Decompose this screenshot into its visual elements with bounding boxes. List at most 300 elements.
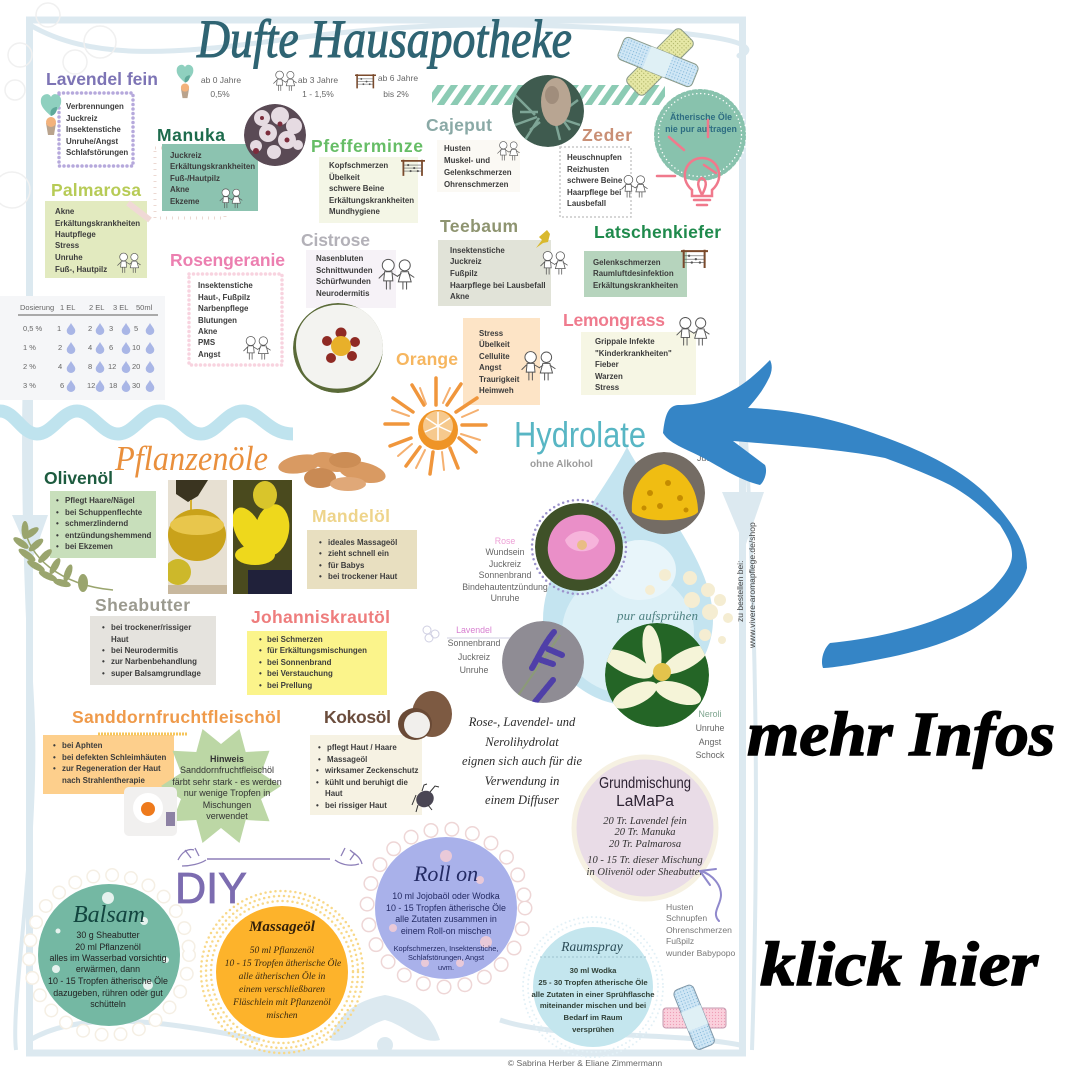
panel: Balsam: 20 ml Pflanzenöl	[75, 942, 141, 952]
heading: Hydrolate: Hydrolate	[514, 414, 646, 455]
arrow: big blue	[663, 360, 1027, 668]
callout: Hinweis star: Hinweis	[210, 754, 244, 764]
text: Lavendel hydrolate: Sonnenbrand	[448, 638, 501, 648]
panel: Mandelöl: ideales Massageöl	[328, 538, 397, 547]
icon: balloon, from birth	[177, 65, 193, 98]
label: pur aufsprühen: pur aufsprühen	[616, 608, 698, 623]
panel: Cajeput: Ohrenschmerzen	[444, 180, 509, 189]
panel: Lemongrass: "Kinderkrankheiten"	[595, 349, 672, 358]
panel: Sanddornfruchtfleischöl: bei Aphten	[62, 741, 103, 750]
panel: Zeder: Haarpflege bei	[567, 188, 621, 197]
footer copyright: © Sabrina Herber & Eliane Zimmermann	[508, 1058, 662, 1068]
photo: cedar cone	[512, 75, 584, 147]
panel: Johanniskrautöl	[247, 607, 390, 695]
text: Lavendel hydrolate: Lavendel	[456, 625, 492, 635]
table: dosage: 6	[109, 343, 113, 352]
panel: Rosengeranie: Haut-, Fußpilz	[198, 293, 250, 302]
panel: Zeder: Reizhusten	[567, 165, 609, 174]
panel: Manuka: Akne	[170, 185, 190, 194]
panel: Manuka: Juckreiz	[170, 151, 202, 160]
panel: Sheabutter: Sheabutter	[95, 595, 190, 615]
panel: Teebaum: Fußpilz	[450, 269, 478, 278]
panel: Olivenöl: •	[56, 496, 59, 505]
panel: Lemongrass: Warzen	[595, 372, 623, 381]
panel: Orange: Traurigkeit	[479, 375, 520, 384]
decorative wave	[0, 411, 293, 434]
panel: Olivenöl: bei Ekzemen	[65, 542, 113, 551]
panel: Lavendel fein: Juckreiz	[66, 114, 98, 123]
lace ornaments top left	[0, 3, 116, 208]
panel: Kokosöl: Massageöl	[327, 755, 367, 764]
panel: Cistrose: Schnittwunden	[316, 266, 373, 275]
callout: Hinweis star	[161, 729, 282, 843]
photo: cistus flower	[293, 303, 383, 393]
text: Neroli hydrolate: Unruhe	[696, 723, 725, 733]
panel: Lemongrass	[563, 310, 709, 395]
panel: Olivenöl: •	[56, 542, 59, 551]
panel: Sheabutter: zur Narbenbehandlung	[111, 657, 197, 666]
photo: St John's wort	[233, 480, 292, 594]
covered label behind arrow: Juckreiz	[697, 453, 729, 463]
panel: Zeder: Zeder	[582, 125, 632, 145]
panel: Johanniskrautöl: •	[259, 635, 262, 644]
panel: Pfefferminze: Pfefferminze	[311, 136, 423, 156]
panel: Kokosöl: •	[318, 755, 321, 764]
table: dosage: 1 EL	[60, 303, 75, 312]
panel: Lemongrass: Lemongrass	[563, 310, 665, 330]
panel: Kokosöl: bei rissiger Haut	[325, 801, 387, 810]
panel: Orange: Orange	[396, 349, 458, 369]
panel: Sanddornfruchtfleischöl	[43, 707, 281, 794]
panel: Cistrose: Nasenbluten	[316, 254, 364, 263]
panel: Massageöl: 50 ml Pflanzenöl	[250, 945, 315, 956]
panel: Sheabutter: •	[102, 669, 105, 678]
age legend	[177, 65, 418, 99]
panel: Teebaum: Juckreiz	[450, 257, 482, 266]
panel: Grundmischung LaMaPa: 20 Tr. Lavendel fein	[603, 816, 687, 827]
callout: Hinweis star: Sanddornfruchtfleischöl	[180, 765, 274, 775]
panel: Johanniskrautöl: bei Prellung	[267, 681, 312, 690]
photo: olive oil bowl	[165, 480, 227, 594]
icon: olive branch	[12, 521, 113, 592]
table: dosage: 50ml	[136, 303, 153, 312]
panel: Kokosöl: •	[316, 766, 319, 775]
text: Lavendel hydrolate: Juckreiz	[458, 652, 490, 662]
panel: Orange: Heimweh	[479, 386, 514, 395]
table: dosage: 10	[132, 343, 140, 352]
panel: Kokosöl: •	[316, 778, 319, 787]
panel: Lemongrass: Fieber	[595, 360, 619, 369]
panel: Palmarosa: Erkältungskrankheiten	[55, 219, 140, 228]
panel: Sheabutter: bei trockener/rissiger	[111, 623, 191, 632]
panel: Johanniskrautöl: •	[259, 681, 262, 690]
text: Lavendel hydrolate	[447, 625, 510, 675]
decorative page frame	[12, 20, 764, 1053]
panel: Roll on: uvm.	[438, 963, 454, 972]
legend text: ab 3 Jahre: ab 3 Jahre	[298, 75, 338, 85]
panel: Olivenöl	[44, 468, 156, 558]
icon: light bulb	[657, 120, 719, 205]
panel: Olivenöl: •	[56, 531, 59, 540]
panel: Sanddornfruchtfleischöl: •	[53, 741, 56, 750]
panel: Mandelöl: •	[319, 549, 322, 558]
panel: Balsam: schütteln	[90, 999, 126, 1009]
panel: Latschenkiefer	[584, 222, 721, 297]
panel: Roll on: Kopfschmerzen, Insektenstiche,	[394, 944, 498, 953]
panel: Johanniskrautöl: Johanniskrautöl	[251, 607, 390, 627]
text: uses of the base mix: Ohrenschmerzen	[666, 925, 732, 935]
panel: Cistrose: Schürfwunden	[316, 277, 371, 286]
panel: Latschenkiefer: Raumluftdesinfektion	[593, 269, 674, 278]
panel: Pfefferminze: schwere Beine	[329, 184, 385, 193]
panel: Mandelöl: •	[319, 572, 322, 581]
table: dosage: 1	[57, 324, 61, 333]
text: Rose hydrolate: Juckreiz	[489, 559, 521, 569]
text: uses of the base mix: wunder Babypopo	[665, 948, 735, 958]
panel: Balsam: Balsam	[73, 902, 145, 928]
panel: Pfefferminze: Übelkeit	[329, 173, 360, 182]
panel: Mandelöl: Mandelöl	[312, 506, 390, 526]
panel: Kokosöl	[310, 707, 422, 815]
panel: Zeder: Lausbefall	[567, 199, 606, 208]
panel: Mandelöl: für Babys	[328, 561, 365, 570]
panel: Palmarosa: Stress	[55, 241, 80, 250]
panel: Sheabutter: •	[102, 657, 105, 666]
table: dosage: 20	[132, 362, 140, 371]
table: dosage: 2	[88, 324, 92, 333]
panel: Rosengeranie: Blutungen	[198, 316, 237, 325]
table: dosage: 6	[60, 381, 64, 390]
panel: Lavendel fein: Unruhe/Angst	[66, 137, 119, 146]
panel: Massageöl	[201, 891, 363, 1053]
panel: Palmarosa: Hautpflege	[55, 230, 96, 239]
text: uses of the base mix: Fußpilz	[666, 936, 694, 946]
panel: Kokosöl: •	[318, 743, 321, 752]
panel: Mandelöl: bei trockener Haut	[328, 572, 398, 581]
panel: Kokosöl: pflegt Haut / Haare	[327, 743, 397, 752]
panel: Rosengeranie: Angst	[198, 350, 221, 359]
panel: Manuka: Erkältungskrankheiten	[170, 162, 255, 171]
heading: Pflanzenöle: Pflanzenöle	[114, 439, 268, 478]
panel: Grundmischung LaMaPa: in Olivenöl oder Sheabutter	[587, 867, 704, 878]
panel: Sheabutter: •	[102, 623, 105, 632]
panel: Roll on	[367, 829, 525, 987]
table: dosage: 12	[87, 381, 95, 390]
table: dosage: 2	[58, 343, 62, 352]
panel: Massageöl: 10 - 15 Tropfen ätherische Öle	[225, 957, 341, 969]
panel: Raumspray: Bedarf im Raum	[564, 1013, 623, 1022]
callout: nie pur auftragen: nie pur auftragen	[665, 124, 737, 134]
panel: Pfefferminze: Erkältungskrankheiten	[329, 196, 414, 205]
icon: coconut	[398, 691, 452, 740]
table: dosage: 2 EL	[89, 303, 104, 312]
callout: Hinweis star: verwendet	[206, 811, 248, 821]
panel: Rosengeranie	[170, 250, 285, 365]
panel: Manuka	[155, 125, 258, 218]
text: diffuser note: Nerolihydrolat	[484, 735, 559, 749]
text: diffuser note: einem Diffuser	[485, 793, 559, 807]
panel: Latschenkiefer: Erkältungskrankheiten	[593, 281, 678, 290]
vertical note: where to order: www.vivere-aromapflege.de/shop	[747, 522, 757, 649]
panel: Rosengeranie: PMS	[198, 338, 215, 347]
callout: Hinweis star: färbt sehr stark - es werden	[172, 777, 282, 787]
panel: Grundmischung LaMaPa	[574, 757, 716, 899]
icon: orange sun	[385, 378, 486, 474]
panel: Orange: Stress	[479, 329, 504, 338]
panel: Raumspray: miteinander mischen und bei	[540, 1001, 646, 1010]
panel: Sheabutter: Haut	[111, 635, 129, 644]
table: dosage: 3	[109, 324, 113, 333]
panel: Johanniskrautöl: bei Sonnenbrand	[267, 658, 332, 667]
photo: neroli blossom	[599, 623, 711, 727]
text: Rose hydrolate: Sonnenbrand	[479, 570, 532, 580]
table: dosage: 4	[88, 343, 92, 352]
panel: Massageöl: Massageöl	[248, 919, 316, 935]
panel: Latschenkiefer: Gelenkschmerzen	[593, 258, 661, 267]
table: dosage: 12	[108, 362, 116, 371]
vertical note: where to order	[735, 522, 757, 649]
panel: Sheabutter: super Balsamgrundlage	[111, 669, 202, 678]
panel: Lavendel fein: Verbrennungen	[66, 102, 124, 111]
lace flourish left of Lavendel	[423, 626, 439, 642]
panel: Manuka: Ekzeme	[170, 197, 200, 206]
panel: Kokosöl: •	[316, 801, 319, 810]
subheading: ohne Alkohol: ohne Alkohol	[530, 459, 593, 470]
panel: Olivenöl: entzündungshemmend	[65, 531, 152, 540]
panel: Teebaum	[438, 216, 567, 306]
panel: Kokosöl: Kokosöl	[324, 707, 391, 727]
panel: Kokosöl: wirksamer Zeckenschutz	[324, 766, 418, 775]
panel: Massageöl: einem verschließbaren	[239, 984, 325, 995]
legend text: ab 6 Jahre: ab 6 Jahre	[378, 73, 418, 83]
panel: Rosengeranie: Rosengeranie	[170, 250, 285, 270]
panel: Balsam: 10 - 15 Tropfen ätherische Öle	[48, 976, 168, 986]
vertical note: where to order: zu bestellen bei:	[735, 561, 745, 622]
panel: Balsam: 30 g Sheabutter	[76, 930, 140, 940]
panel: Olivenöl: •	[56, 508, 59, 517]
panel: Palmarosa: Palmarosa	[51, 180, 141, 200]
panel: Olivenöl: bei Schuppenflechte	[65, 508, 143, 517]
legend text: ab 6 Jahre: bis 2%	[383, 89, 409, 99]
panel: Zeder	[560, 125, 647, 217]
panel: Rosengeranie: Akne	[198, 327, 218, 336]
icon: almonds	[277, 448, 388, 491]
panel: Lavendel fein: Insektenstiche	[66, 125, 121, 134]
panel: Mandelöl: •	[319, 538, 322, 547]
panel: Orange	[396, 318, 555, 405]
panel: Olivenöl: •	[56, 519, 59, 528]
panel: Johanniskrautöl: für Erkältungsmischungen	[267, 646, 367, 655]
handwritten: mehr Infos: mehr Infos	[747, 701, 1055, 769]
text: Rose hydrolate	[462, 536, 548, 603]
panel: Johanniskrautöl: •	[259, 646, 262, 655]
panel: Sanddornfruchtfleischöl: zur Regeneration der Haut	[62, 764, 161, 773]
panel: Palmarosa	[45, 180, 150, 278]
panel: Olivenöl: Olivenöl	[44, 468, 113, 488]
table: dosage: 18	[109, 381, 117, 390]
panel: Manuka: Manuka	[157, 125, 225, 145]
text: uses of the base mix: Husten	[666, 902, 693, 912]
panel: Massageöl: Fläschlein mit Pflanzenöl	[232, 997, 331, 1008]
panel: Mandelöl: zieht schnell ein	[328, 549, 389, 558]
panel: Palmarosa: Fuß-, Hautpilz	[55, 265, 107, 274]
callout: Hinweis star: nur wenige Tropfen in	[184, 788, 270, 798]
handwritten: klick hier: klick hier	[760, 931, 1039, 999]
icon: children, from 3 years	[274, 71, 296, 91]
panel: Johanniskrautöl: bei Verstauchung	[267, 669, 333, 678]
panel: Lavendel fein: Lavendel fein	[46, 69, 158, 89]
legend text: ab 0 Jahre: 0,5%	[210, 89, 230, 99]
panel: Massageöl: mischen	[266, 1011, 298, 1021]
panel: Roll on: 10 ml Jojobaöl oder Wodka	[392, 891, 500, 901]
panel: Manuka: Fuß-/Hautpilz	[170, 174, 220, 183]
panel: Raumspray: 30 ml Wodka	[570, 966, 617, 975]
table: dosage: Dosierung	[20, 303, 54, 312]
panel: Sanddornfruchtfleischöl: •	[53, 764, 56, 773]
panel: Raumspray: Raumspray	[560, 939, 623, 954]
text: Neroli hydrolate: Angst	[699, 737, 722, 747]
panel: Cajeput: Muskel- und	[444, 156, 490, 165]
callout: nie pur auftragen	[654, 88, 746, 182]
panel: Latschenkiefer: Latschenkiefer	[594, 222, 721, 242]
decorative flourish above DIY	[178, 848, 362, 866]
text: diffuser note: Rose-, Lavendel- und	[468, 715, 576, 729]
panel: Balsam: erwärmen, dann	[76, 964, 140, 974]
text: Neroli hydrolate	[696, 709, 725, 760]
panel: Olivenöl: schmerzlindernd	[65, 519, 128, 528]
table: dosage: 1 %	[23, 343, 36, 352]
panel: Raumspray	[523, 917, 663, 1057]
panel: Balsam: alles im Wasserbad vorsichtig	[49, 953, 167, 963]
photo: yellow immortelle	[623, 452, 705, 534]
panel: Massageöl: alle ätherischen Öle in	[239, 970, 326, 982]
legend text: ab 0 Jahre: ab 0 Jahre	[201, 75, 241, 85]
panel: Cajeput: Gelenkschmerzen	[444, 168, 512, 177]
panel: Teebaum: Teebaum	[440, 216, 518, 236]
panel: Roll on: Schlafstörungen, Angst	[408, 953, 484, 962]
panel: Raumspray: 25 - 30 Tropfen ätherische Öle	[538, 978, 648, 987]
panel: Lemongrass: Stress	[595, 383, 620, 392]
panel: Grundmischung LaMaPa: 10 - 15 Tr. dieser Mischung	[587, 855, 703, 866]
panel: Teebaum: Haarpflege bei Lausbefall	[450, 281, 546, 290]
panel: Teebaum: Akne	[450, 292, 470, 301]
panel: Orange: Cellulite	[479, 352, 510, 361]
icon: tick	[412, 784, 439, 812]
panel: Orange: Übelkeit	[479, 340, 510, 349]
title: Dufte Hausapotheke	[196, 9, 572, 69]
panel: Sanddornfruchtfleischöl: nach Strahlentherapie	[62, 776, 145, 785]
callout: Hinweis star: Mischungen	[203, 800, 251, 810]
table: dosage: 8	[88, 362, 92, 371]
panel: Pfefferminze	[311, 136, 425, 223]
table: dosage: 3 EL	[113, 303, 128, 312]
panel: Cajeput: Husten	[444, 144, 471, 153]
panel: Johanniskrautöl: •	[259, 669, 262, 678]
panel: Lavendel fein: Schlafstörungen	[66, 148, 128, 157]
panel: Johanniskrautöl: •	[259, 658, 262, 667]
panel: Palmarosa: Akne	[55, 207, 75, 216]
arrow: purple to Grundmischung	[700, 869, 721, 921]
photo: sea buckthorn oil bowl	[124, 787, 177, 836]
text: uses of the base mix: Schnupfen	[666, 913, 707, 923]
panel: Balsam	[29, 875, 189, 1035]
panel: Olivenöl: Pflegt Haare/Nägel	[65, 496, 135, 505]
panel: Raumspray: versprühen	[572, 1025, 614, 1034]
panel: Sanddornfruchtfleischöl: Sanddornfruchtfleischöl	[72, 707, 281, 727]
panel: Cistrose: Cistrose	[301, 230, 370, 250]
panel: Sanddornfruchtfleischöl: •	[53, 753, 56, 762]
text: Rose hydrolate: Bindehautentzündung	[462, 582, 548, 592]
text: Lavendel hydrolate: Unruhe	[460, 665, 489, 675]
text: Neroli hydrolate: Neroli	[699, 709, 722, 719]
panel: Grundmischung LaMaPa: 20 Tr. Manuka	[615, 827, 675, 838]
panel: Sheabutter: •	[102, 646, 105, 655]
table: dosage: 0,5 %	[23, 324, 43, 333]
table: dosage: 2 %	[23, 362, 36, 371]
panel: Roll on: alle Zutaten zusammen in	[395, 914, 497, 924]
panel: Sheabutter	[90, 595, 216, 685]
table: dosage: 3 %	[23, 381, 36, 390]
panel: Lemongrass: Grippale Infekte	[595, 337, 655, 346]
text: Rose hydrolate: Unruhe	[491, 593, 520, 603]
panel: Sheabutter: bei Neurodermitis	[111, 646, 179, 655]
panel: Orange: Angst	[479, 363, 502, 372]
panel: Zeder: Heuschnupfen	[567, 153, 622, 162]
photo: lavender	[502, 621, 584, 703]
panel: Kokosöl: Haut	[325, 789, 343, 798]
panel: Roll on: einem Roll-on mischen	[401, 926, 491, 936]
panel: Cistrose: Neurodermitis	[316, 289, 370, 298]
panel: Roll on: 10 - 15 Tropfen ätherische Öle	[386, 903, 506, 913]
panel: Kokosöl: kühlt und beruhigt die	[325, 778, 408, 787]
panel: Raumspray: alle Zutaten in einer Sprühflasche	[531, 990, 655, 999]
icon: plaster top	[616, 27, 700, 97]
panel: Teebaum: Insektenstiche	[450, 246, 505, 255]
panel: Grundmischung LaMaPa: LaMaPa	[616, 793, 674, 810]
panel: Rosengeranie: Insektenstiche	[198, 281, 253, 290]
icon: abacus, from 6 years	[355, 74, 376, 88]
panel: Cajeput: Cajeput	[426, 115, 492, 135]
panel: Zeder: schwere Beine	[567, 176, 623, 185]
panel: Mandelöl: •	[319, 561, 322, 570]
table: dosage: 30	[132, 381, 140, 390]
panel: Cajeput	[426, 115, 520, 192]
panel: Balsam: dazugeben, rühren oder gut	[53, 988, 163, 998]
text: Neroli hydrolate: Schock	[696, 750, 725, 760]
table: dosage	[0, 296, 165, 400]
panel: Grundmischung LaMaPa: 20 Tr. Palmarosa	[609, 839, 681, 850]
heading: DIY: DIY	[175, 864, 247, 913]
panel: Lavendel fein	[41, 69, 158, 166]
panel: Cistrose	[301, 230, 414, 308]
panel: Pfefferminze: Mundhygiene	[329, 207, 380, 216]
legend text: ab 3 Jahre: 1 - 1,5%	[302, 89, 334, 99]
text: diffuser note: eignen sich auch für die	[462, 754, 583, 768]
panel: Johanniskrautöl: bei Schmerzen	[267, 635, 323, 644]
text: diffuser note: Verwendung in	[485, 774, 559, 788]
photo: pink rose	[532, 500, 626, 594]
panel: Rosengeranie: Narbenpflege	[198, 304, 249, 313]
panel: Mandelöl	[307, 506, 417, 589]
callout: nie pur auftragen: Ätherische Öle	[670, 112, 732, 122]
decorative stripes	[432, 85, 665, 105]
icon: plaster bottom	[663, 984, 726, 1051]
panel: Sanddornfruchtfleischöl: bei defekten Schleimhäuten	[62, 753, 167, 762]
panel: Grundmischung LaMaPa: Grundmischung	[599, 775, 691, 792]
panel: Roll on: Roll on	[413, 861, 478, 886]
panel: Palmarosa: Unruhe	[55, 253, 83, 262]
table: dosage: 4	[58, 362, 62, 371]
